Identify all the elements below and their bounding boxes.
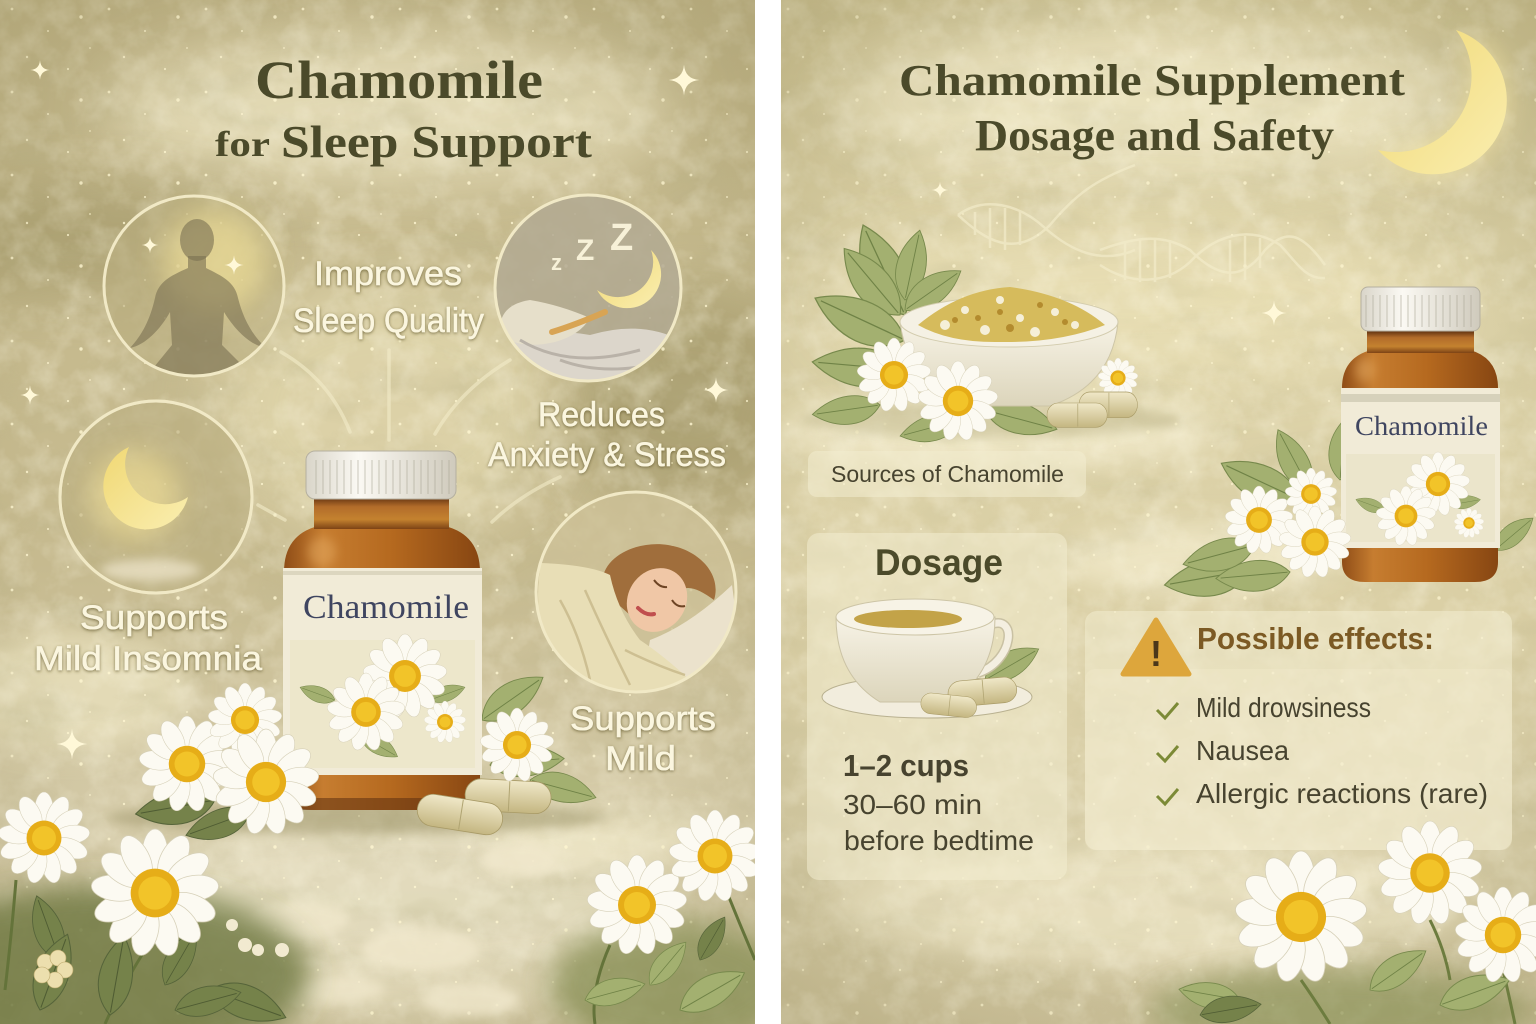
- dosage timing: [843, 789, 1034, 856]
- icon: warning triangle: [1123, 620, 1189, 674]
- bottle: chamomile with flowers: [1162, 287, 1536, 604]
- foliage behind bottle: [110, 664, 610, 849]
- panel: possible effects: [1085, 611, 1512, 850]
- dosage timing: before bedtime: [844, 825, 1034, 856]
- icon: sleeping woman circle: [536, 492, 745, 700]
- effects heading: Possible effects:: [1197, 621, 1434, 656]
- text labels: Mild: [605, 740, 676, 778]
- title: for: [215, 124, 270, 164]
- sources illustration: bowl and flowers: [800, 217, 1180, 449]
- label: sources of chamomile: [808, 451, 1086, 497]
- dosage heading: Dosage: [875, 542, 1003, 583]
- bottle label: [1341, 388, 1500, 548]
- icon: crescent moon: [1378, 30, 1507, 174]
- icon: sleeping zzz and moon circle: [495, 195, 681, 390]
- text labels: Mild Insomnia: [34, 640, 262, 678]
- text labels: Anxiety & Stress: [488, 436, 726, 474]
- title: Chamomile: [255, 50, 543, 110]
- connector rays: [258, 350, 560, 522]
- bottle label: Chamomile: [303, 589, 469, 626]
- foreground flowers and foliage: [0, 792, 790, 1024]
- effects list: Mild drowsiness: [1196, 692, 1371, 723]
- effects list: [1157, 692, 1488, 809]
- dosage timing: 30–60 min: [843, 789, 982, 820]
- text labels: Sleep Quality: [293, 302, 484, 340]
- title: Dosage and Safety: [975, 111, 1334, 160]
- icon: sleeping zzz and moon circle: z: [551, 250, 562, 275]
- text labels: Improves: [314, 255, 462, 293]
- text labels: Reduces: [538, 396, 665, 434]
- chamomile flowers around bottle: [138, 683, 555, 836]
- icon: meditating body circle: [104, 196, 284, 376]
- foreground flowers and foliage: [1150, 821, 1536, 1024]
- bowl: [900, 322, 1118, 406]
- bottle cap: [1361, 287, 1480, 331]
- effects list: Nausea: [1196, 735, 1289, 766]
- panel: chamomile for sleep support: [0, 0, 810, 1024]
- panel: dosage: [807, 533, 1067, 880]
- icon: warning triangle: !: [1150, 633, 1162, 674]
- icon: tea cup and saucer: [822, 599, 1045, 719]
- text labels: Supports: [570, 700, 716, 738]
- effects list: Allergic reactions (rare): [1196, 778, 1488, 809]
- icon: crescent moon circle: [60, 401, 252, 593]
- label: sources of chamomile: Sources of Chamomile: [831, 461, 1064, 487]
- icon: dna helix: [958, 165, 1325, 282]
- panel: chamomile supplement dosage and safety: [780, 0, 1536, 1024]
- title: Sleep Support: [281, 116, 593, 167]
- background: misty clouds: [0, 0, 810, 1024]
- text labels: [34, 255, 726, 778]
- title: [215, 50, 593, 167]
- bottle label: [283, 568, 482, 775]
- bottle: chamomile: [283, 451, 482, 810]
- capsules: [415, 778, 552, 837]
- icon: sleeping zzz and moon circle: Z: [610, 217, 633, 259]
- dosage amount: 1–2 cups: [843, 748, 969, 783]
- bottle label: Chamomile: [1355, 411, 1488, 441]
- text labels: Supports: [80, 599, 228, 637]
- bottle cap: [306, 451, 456, 499]
- title: Chamomile Supplement: [899, 56, 1405, 105]
- background: misty clouds: [780, 0, 1536, 1024]
- title: [899, 56, 1405, 160]
- icon: sleeping zzz and moon circle: Z: [576, 234, 594, 267]
- dried chamomile pile: [918, 287, 1105, 342]
